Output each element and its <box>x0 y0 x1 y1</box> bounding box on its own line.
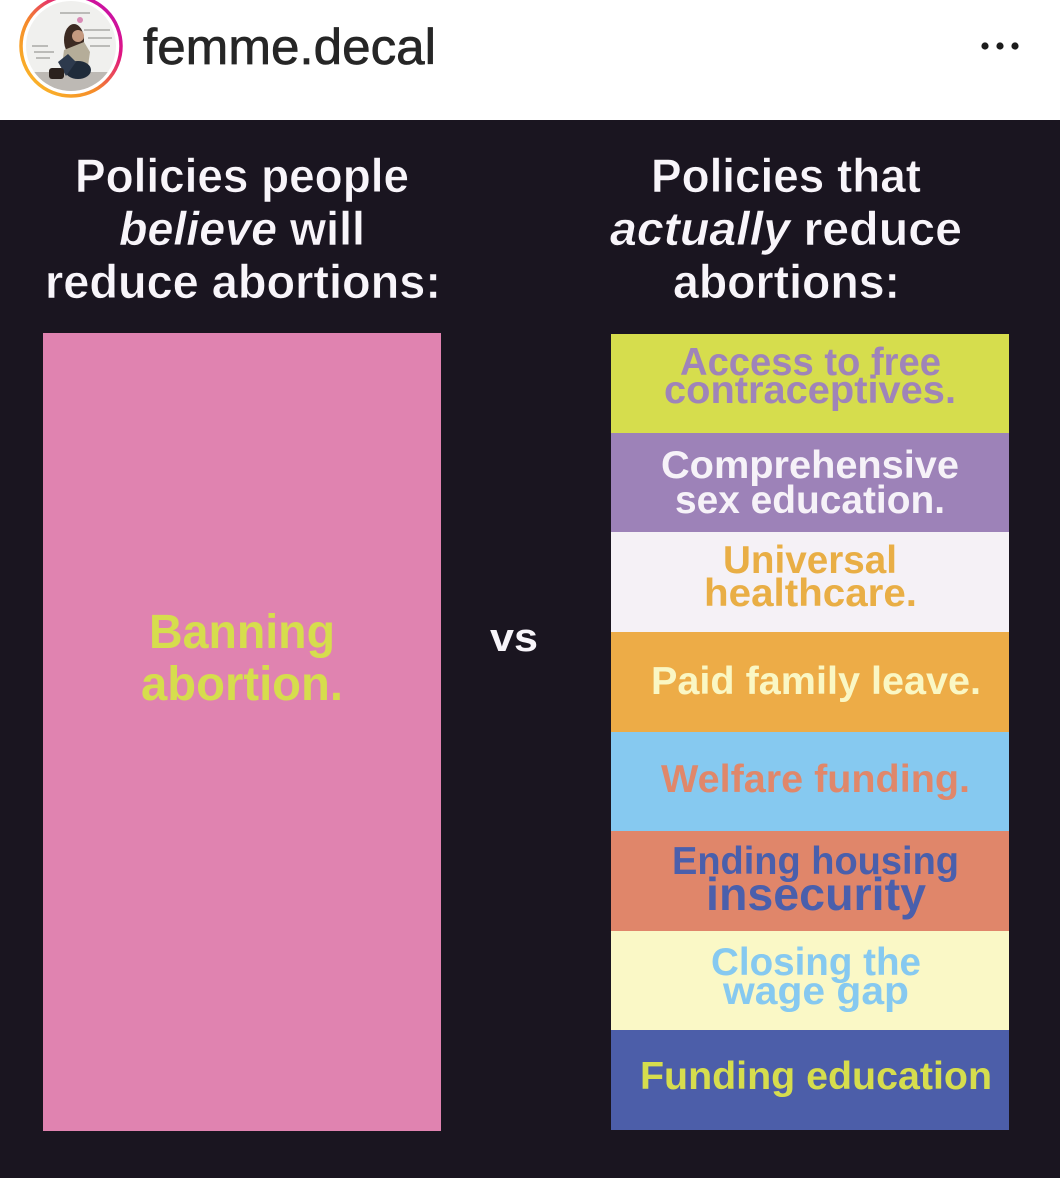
row: welfare funding: Welfare funding. <box>661 758 970 801</box>
row: universal healthcare <box>611 532 1009 632</box>
row: wage gap: wage gap <box>722 970 909 1013</box>
profile header <box>21 0 1019 96</box>
panel: banning abortion <box>43 333 441 1131</box>
icon: profile avatar <box>21 0 121 96</box>
versus label: vs <box>490 616 538 660</box>
row: funding education: Funding education <box>640 1055 992 1098</box>
heading: right column <box>610 149 962 308</box>
heading: left column <box>45 149 441 308</box>
row: funding education <box>611 1030 1009 1130</box>
row: sex education <box>611 433 1009 532</box>
row: free contraceptives: contraceptives. <box>664 369 956 412</box>
username: femme.decal <box>143 19 436 75</box>
heading: right column: abortions: <box>673 255 900 308</box>
row: free contraceptives <box>611 334 1009 433</box>
row: sex education: Comprehensive <box>661 444 959 487</box>
icon: more options dots <box>981 42 1019 50</box>
heading: left column: believe will <box>119 202 365 255</box>
row: paid family leave: Paid family leave. <box>651 660 981 703</box>
heading: right column: Policies that <box>651 149 921 202</box>
row: wage gap: Closing the <box>711 941 921 984</box>
row: universal healthcare: Universal <box>723 539 897 582</box>
row: sex education: sex education. <box>675 479 945 522</box>
row: universal healthcare: healthcare. <box>704 572 917 615</box>
row: housing insecurity: Ending housing <box>672 840 959 883</box>
row: housing insecurity: insecurity <box>706 868 926 920</box>
heading: left column: reduce abortions: <box>45 255 441 308</box>
row: free contraceptives: Access to free <box>680 341 941 384</box>
row: wage gap <box>611 931 1009 1030</box>
heading: right column: actually reduce <box>610 202 962 255</box>
panel: banning abortion: abortion. <box>141 658 343 711</box>
row: paid family leave <box>611 632 1009 732</box>
row: housing insecurity <box>611 831 1009 931</box>
panel: effective policies list <box>611 334 1009 1130</box>
row: welfare funding <box>611 732 1009 831</box>
heading: left column: Policies people <box>75 149 409 202</box>
panel: banning abortion: Banning <box>149 606 335 659</box>
